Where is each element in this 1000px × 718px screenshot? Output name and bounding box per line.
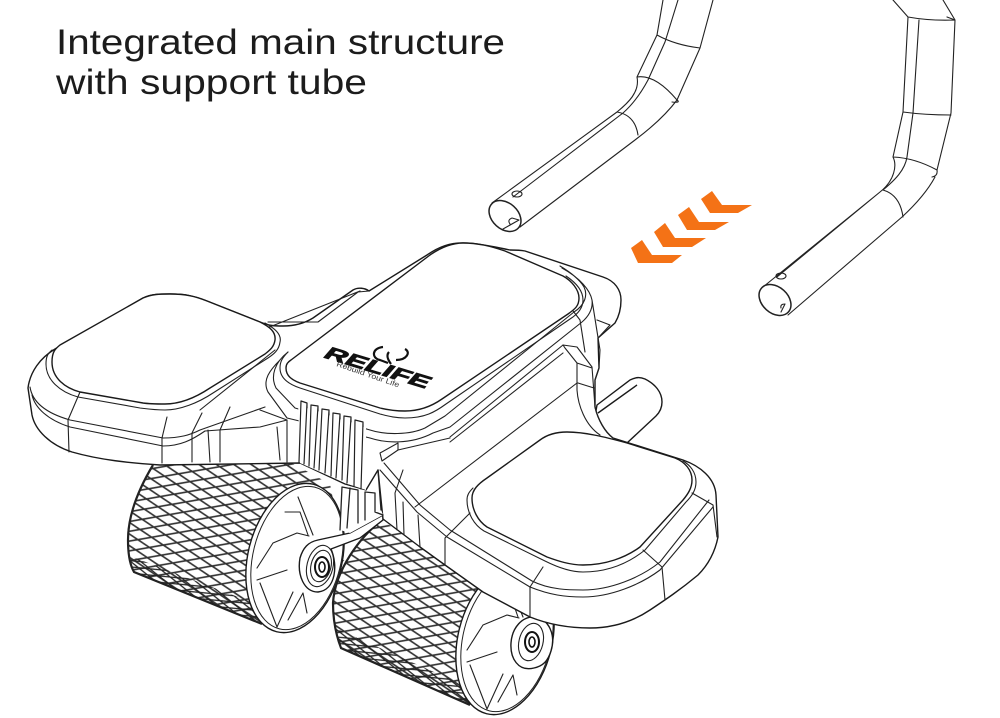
logo horns icon	[374, 347, 408, 364]
title	[55, 23, 505, 102]
rear cylinder stub	[590, 378, 662, 445]
right arch	[563, 345, 613, 438]
vent fins	[298, 400, 366, 490]
right wheel hub	[511, 617, 553, 669]
title: with support tube	[55, 63, 367, 102]
body rim lines	[266, 266, 610, 450]
right support tube	[753, 0, 955, 322]
right roller	[332, 521, 555, 716]
right wing seams	[395, 470, 717, 617]
main body outline	[28, 243, 718, 628]
left roller	[126, 464, 345, 634]
central top pad	[280, 243, 583, 418]
left wing contour lines	[30, 291, 369, 446]
left wing seams	[68, 350, 287, 463]
right knee pad	[467, 432, 696, 572]
title: Integrated main structure	[56, 23, 505, 62]
left wheel hub and fork arm	[299, 515, 383, 592]
left pad cushion	[52, 294, 275, 404]
logo: RELIFE	[319, 344, 437, 392]
left knee pad	[46, 294, 280, 410]
logo tagline: Rebuild Your Life	[335, 359, 401, 389]
logo wordmark: RELIFE	[319, 344, 437, 392]
center fork	[340, 470, 383, 533]
orange direction arrows	[631, 191, 752, 263]
central pad cushion	[286, 243, 579, 411]
right pad cushion	[472, 432, 692, 565]
left support tube	[483, 0, 713, 238]
right wing contour lines	[380, 383, 713, 597]
